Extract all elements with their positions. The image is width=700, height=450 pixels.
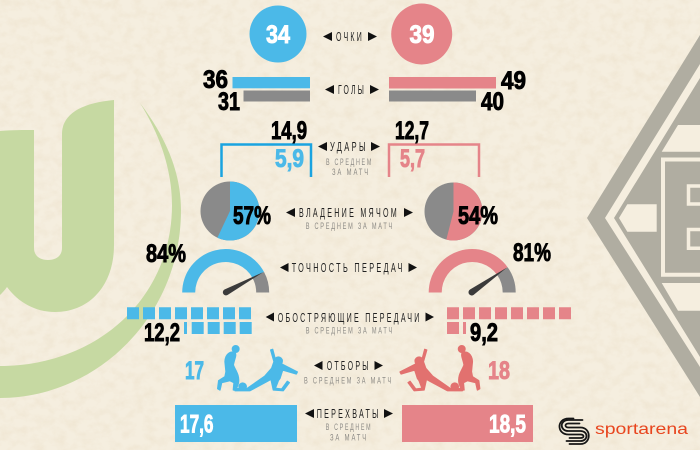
pie: left possession: 57%	[233, 202, 271, 230]
row: shots	[222, 117, 479, 178]
right interceptions bar	[402, 405, 533, 442]
wordmark: sportarena	[595, 421, 688, 438]
Wolfsburg logo watermark	[0, 100, 181, 398]
left interceptions bar: 17,6	[180, 410, 214, 438]
left shots bracket: 14,9	[271, 117, 307, 145]
label: tackles: В СРЕДНЕМ ЗА МАТЧ	[304, 376, 393, 386]
right tackle value: 18	[488, 357, 510, 385]
pie: right possession: 54%	[458, 202, 498, 230]
label: key passes: ОБОСТРЯЮЩИЕ ПЕРЕДАЧИ	[278, 311, 422, 325]
label: interceptions: ПЕРЕХВАТЫ	[317, 407, 381, 421]
right shots bracket: 12,7	[395, 117, 429, 145]
sportarena logo	[560, 418, 688, 444]
left goals bars: 31	[218, 88, 240, 116]
icon: right players tackling	[400, 346, 480, 391]
right shots bracket: 5,7	[400, 145, 425, 173]
gauge: left pass accuracy	[146, 240, 269, 295]
left interceptions bar	[175, 405, 297, 442]
right key passes squares	[447, 307, 571, 347]
left key passes squares	[127, 307, 252, 347]
gauge: right pass accuracy: 81%	[513, 239, 551, 267]
gauge: right pass accuracy	[429, 239, 551, 296]
circle: right team points: 39	[410, 21, 434, 49]
right shots bracket	[389, 117, 479, 177]
pie: left possession	[200, 182, 271, 240]
label: shots: В СРЕДНЕМ	[326, 157, 373, 168]
label: possession	[286, 206, 413, 232]
label: points: ОЧКИ	[336, 30, 364, 44]
label: shots: УДАРЫ	[330, 140, 368, 154]
label: possession: ВЛАДЕНИЕ МЯЧОМ	[299, 206, 399, 220]
left tackle value: 17	[185, 357, 204, 385]
row: tackles	[185, 346, 510, 391]
label: tackles: ОТБОРЫ	[327, 359, 371, 373]
label: pass accuracy: ТОЧНОСТЬ ПЕРЕДАЧ	[292, 261, 405, 275]
row: goals	[203, 66, 526, 116]
right goals bars	[389, 67, 526, 116]
label: tackles	[304, 359, 393, 386]
label: key passes	[266, 311, 434, 336]
row: pass accuracy	[146, 239, 551, 296]
Borussia badge watermark	[587, 35, 700, 397]
label: interceptions: ЗА МАТЧ	[330, 432, 368, 444]
left goals bars: 36	[203, 66, 228, 94]
left shots bracket: 5,9	[275, 145, 304, 173]
left key passes squares: 12,2	[144, 319, 180, 347]
pie: right possession	[424, 182, 498, 240]
label: interceptions: В СРЕДНЕМ	[326, 422, 372, 433]
row: possession	[200, 182, 498, 240]
label: possession: В СРЕДНЕМ ЗА МАТЧ	[306, 221, 394, 232]
icon: sportarena mark	[560, 418, 589, 444]
right interceptions bar: 18,5	[489, 410, 526, 438]
icon: left players tackling	[218, 346, 297, 391]
label: pass accuracy	[280, 261, 417, 275]
right key passes squares: 9,2	[470, 319, 498, 347]
label: points	[323, 30, 377, 44]
circle: right team points	[391, 4, 452, 64]
label: goals	[325, 83, 379, 97]
row: points	[250, 4, 452, 64]
row: key passes	[127, 307, 571, 347]
row: interceptions	[175, 405, 533, 444]
label: goals: ГОЛЫ	[338, 83, 366, 97]
label: interceptions	[305, 407, 393, 444]
label: shots: ЗА МАТЧ	[332, 167, 370, 178]
right goals bars: 40	[481, 88, 504, 116]
label: shots	[318, 140, 380, 178]
left goals bars	[203, 66, 310, 116]
label: key passes: В СРЕДНЕМ ЗА МАТЧ	[306, 326, 394, 336]
left shots bracket	[222, 117, 311, 177]
gauge: left pass accuracy: 84%	[146, 240, 186, 268]
right goals bars: 49	[501, 67, 526, 95]
circle: left team points: 34	[266, 21, 290, 49]
circle: left team points	[250, 6, 306, 62]
